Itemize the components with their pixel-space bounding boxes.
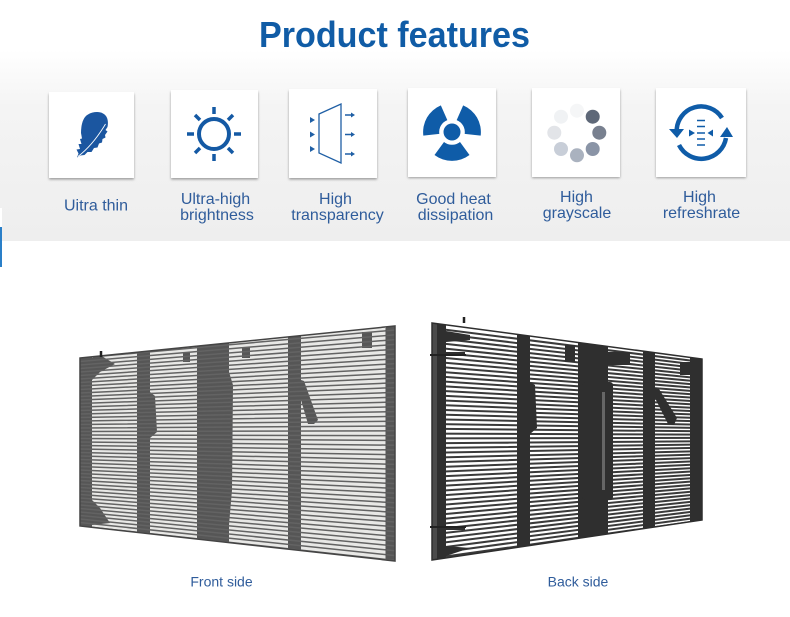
caption: front side: Front side <box>190 574 253 590</box>
label: brightness <box>180 207 254 224</box>
horizontal slats, back <box>446 328 690 558</box>
label: dissipation <box>418 207 493 224</box>
dark structural bands, back <box>432 315 702 565</box>
label <box>180 191 254 224</box>
label <box>291 191 384 224</box>
icon: feather <box>76 112 108 158</box>
label <box>543 189 611 222</box>
horizontal slats, front <box>80 330 395 560</box>
header background band <box>0 50 790 241</box>
icon: sun <box>187 107 241 161</box>
card: heat dissipation <box>408 88 496 224</box>
title: Product features <box>259 14 530 55</box>
label: Good heat <box>416 191 491 208</box>
label: transparency <box>291 207 384 224</box>
card: ultra thin <box>49 92 134 214</box>
label <box>416 191 493 224</box>
icon: refresh cycle <box>669 106 733 159</box>
label: grayscale <box>543 205 611 222</box>
label: High <box>560 189 593 206</box>
card: brightness <box>171 90 258 224</box>
card: grayscale <box>532 88 620 222</box>
card: refresh rate <box>656 88 746 222</box>
label: Uitra thin <box>64 198 128 214</box>
icon: transparent panel with arrows <box>310 104 355 163</box>
label: High <box>319 191 352 208</box>
icon: gray dots ring <box>547 104 606 162</box>
label: refreshrate <box>663 205 740 222</box>
dark structural bands, front <box>80 320 395 570</box>
label: High <box>683 189 716 206</box>
icon: fan <box>418 102 486 161</box>
panel: front side <box>80 320 395 570</box>
left edge marker <box>0 208 2 267</box>
label: Ultra-high <box>181 191 250 208</box>
card: transparency <box>289 89 384 224</box>
caption: back side: Back side <box>548 574 609 590</box>
panel: back side <box>430 315 702 565</box>
label <box>663 189 740 222</box>
